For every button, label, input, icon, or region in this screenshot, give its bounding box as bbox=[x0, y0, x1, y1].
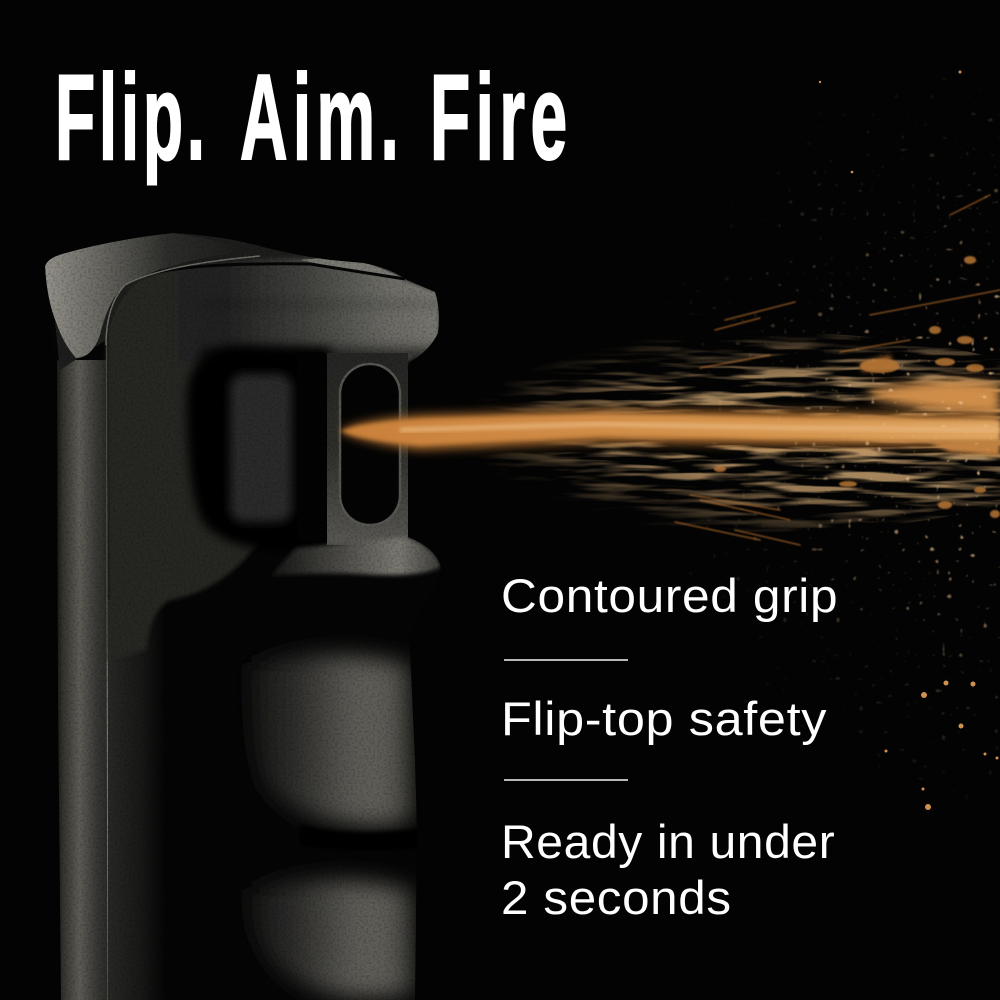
spark streaks bbox=[675, 195, 1000, 545]
nozzle opening bbox=[340, 364, 400, 525]
cap back bbox=[49, 233, 318, 370]
recess shadow bbox=[187, 346, 330, 551]
panel upper bbox=[106, 256, 260, 660]
product: spray canister bbox=[40, 225, 450, 1000]
grip bulge lower bbox=[250, 880, 418, 997]
feature: ready in under 2 seconds: 2 seconds bbox=[501, 871, 732, 924]
feature: ready in under 2 seconds bbox=[501, 815, 835, 924]
title bbox=[55, 48, 567, 186]
feature: ready in under 2 seconds: Ready in under bbox=[501, 815, 835, 868]
grip valley bbox=[303, 828, 416, 843]
stream soft edge bbox=[340, 410, 1000, 450]
side panel bbox=[108, 600, 155, 1000]
title: Flip. bbox=[55, 48, 205, 185]
feature: contoured grip: Contoured grip bbox=[501, 569, 838, 622]
title: Aim. bbox=[240, 48, 399, 185]
nozzle frame bbox=[327, 353, 408, 545]
ring shading bbox=[200, 300, 445, 360]
spine edge line bbox=[106, 345, 108, 1000]
upper plume bbox=[868, 381, 1000, 414]
grip bulge upper bbox=[250, 655, 417, 826]
left spine bbox=[57, 360, 107, 1000]
cap front ring bbox=[234, 256, 439, 364]
cap ridge bbox=[300, 258, 399, 276]
stream core bbox=[340, 414, 1000, 445]
canister base bbox=[40, 225, 450, 1000]
spark dots bbox=[819, 70, 998, 810]
recess lit patch bbox=[230, 374, 292, 522]
fan of spark streaks bbox=[486, 334, 1000, 532]
flip lever bbox=[45, 233, 202, 358]
surface grain bbox=[40, 225, 450, 1000]
stream highlight bbox=[400, 424, 1000, 430]
spark blobs bbox=[714, 256, 1000, 518]
title: Fire bbox=[430, 48, 567, 185]
body edge curve bbox=[106, 256, 260, 345]
nozzle groove bbox=[297, 352, 327, 542]
spray stream bbox=[337, 70, 1000, 810]
feature: flip-top safety: Flip-top safety bbox=[501, 692, 827, 745]
lower collar bbox=[270, 537, 441, 576]
particle cloud bbox=[674, 78, 1000, 798]
